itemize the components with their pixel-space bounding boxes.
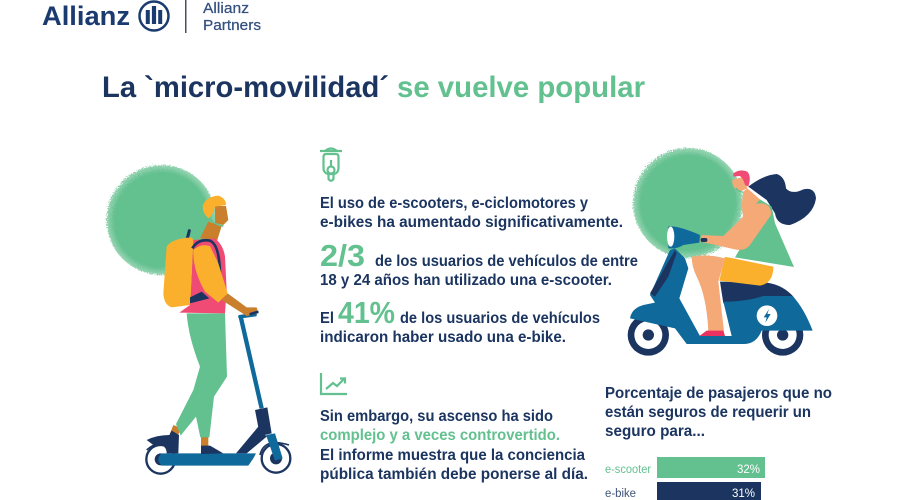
rider legs (147, 313, 227, 454)
bar: e-bike 31% (605, 482, 761, 500)
handlebar and headlamp (667, 226, 700, 249)
icon: growth chart (321, 373, 347, 394)
chart heading (605, 385, 832, 440)
Allianz emblem (140, 2, 168, 30)
statistic: 2/3: 2/3 (320, 238, 365, 273)
Allianz Partners wordmark: Partners (203, 17, 261, 34)
statistic: 41%: indicaron haber usado una e-bike. (320, 329, 566, 346)
bar: e-bike 31%: e-bike (605, 488, 636, 500)
hair (748, 174, 816, 225)
rider torso and head (163, 196, 258, 316)
text block: e-scooter usage: e-bikes ha aumentado significativamente. (320, 214, 623, 231)
text block: controversy: complejo y a veces controvertido. (320, 427, 560, 444)
scooter stem and handle (240, 315, 262, 408)
Allianz Partners wordmark: Allianz (203, 0, 249, 17)
statistic: 41%: de los usuarios de vehículos (400, 310, 600, 327)
title: La `micro-movilidad´ (102, 71, 389, 104)
rider upper body (700, 170, 794, 267)
textured green circle (633, 148, 743, 258)
text block: controversy: El informe muestra que la conciencia (320, 447, 585, 464)
statistic: 2/3: 18 y 24 años han utilizado una e-scooter. (320, 272, 612, 289)
bar: e-scooter 32%: e-scooter (605, 464, 651, 476)
Allianz Partners wordmark (203, 0, 261, 34)
bar: e-scooter 32% (605, 457, 765, 478)
bar: e-bike 31%: 31% (732, 488, 755, 500)
textured green circle (106, 165, 216, 275)
statistic: 41%: El (320, 310, 334, 327)
statistic: 41% (320, 295, 600, 346)
text block: e-scooter usage: El uso de e-scooters, e-ciclomotores y (320, 195, 588, 212)
text block: controversy: Sin embargo, su ascenso ha sido (320, 408, 553, 425)
Allianz wordmark: Allianz (42, 1, 130, 31)
bar: e-scooter 32%: 32% (737, 464, 760, 476)
rider (692, 170, 794, 336)
text block: controversy (320, 408, 588, 483)
text block: controversy: pública también debe ponerse al día. (320, 466, 588, 483)
title: se vuelve popular (397, 71, 645, 104)
moped (628, 248, 813, 356)
chart heading: Porcentaje de pasajeros que no (605, 385, 832, 402)
rider lower body (692, 255, 773, 336)
chart heading: están seguros de requerir un (605, 404, 811, 421)
icon: moped outline (320, 148, 342, 181)
illustration: woman on moped (628, 148, 816, 356)
chart heading: seguro para... (605, 423, 705, 440)
text block: e-scooter usage (320, 195, 623, 231)
logo: Allianz Partners (42, 0, 261, 34)
illustration: person on e-scooter (106, 165, 290, 474)
scooter base (146, 407, 290, 474)
bar chart (605, 457, 765, 500)
title (102, 71, 645, 104)
statistic: 2/3: de los usuarios de vehículos de entre (375, 253, 638, 270)
statistic: 41%: 41% (338, 295, 395, 330)
statistic: 2/3 (320, 238, 638, 289)
